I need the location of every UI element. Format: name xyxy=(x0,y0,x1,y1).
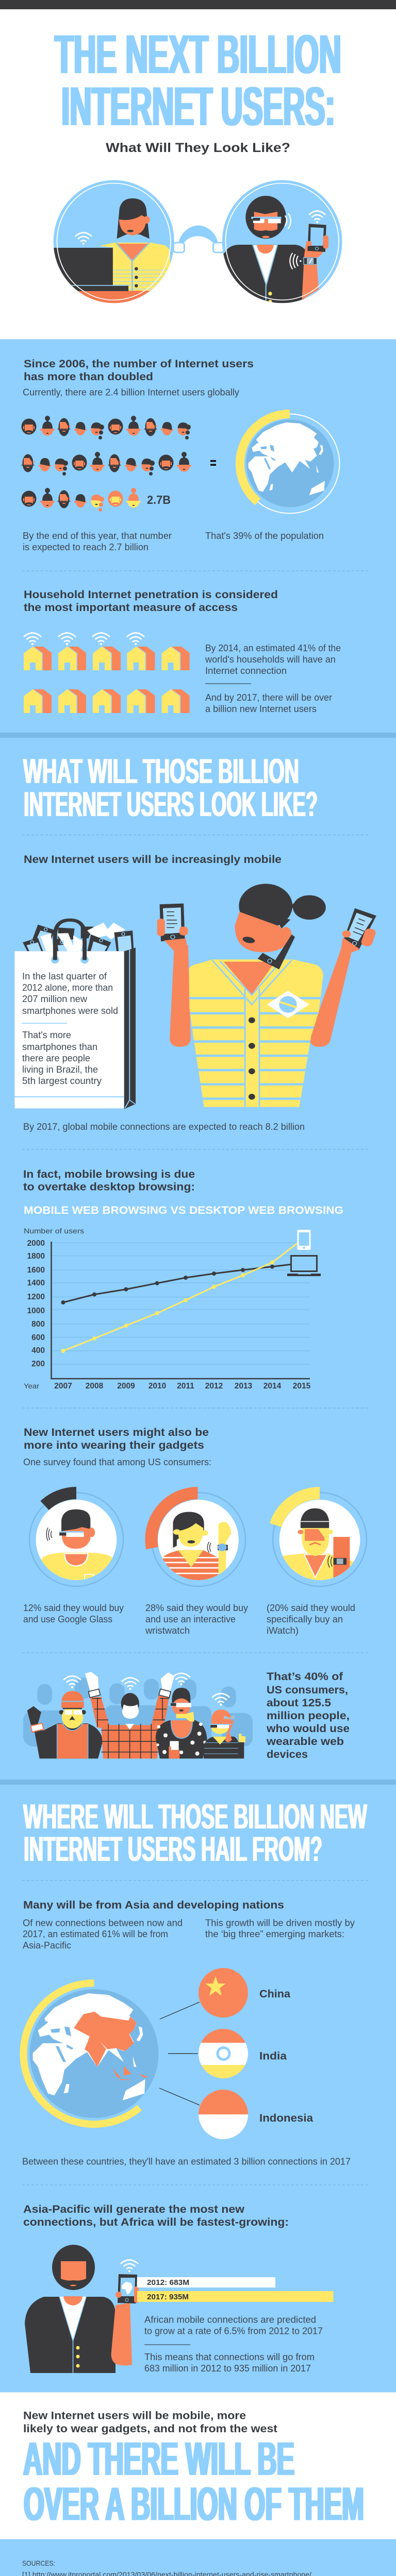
label: Indonesia: Indonesia xyxy=(259,2112,313,2124)
left lens: woman with laptop xyxy=(54,180,174,303)
text: reach 2.7 billion: By the end of this year, that number xyxy=(23,531,172,541)
text: survey results: (20% said they would xyxy=(267,1603,355,1613)
text: survey results: wristwatch xyxy=(145,1625,190,1636)
text: African connections: 683 million in 2012 to 935 million in 2017 xyxy=(144,2363,311,2374)
section heading: where from xyxy=(23,1797,367,1869)
text: African connections: to grow at a rate of 6.5% from 2012 to 2017 xyxy=(144,2326,323,2336)
text on bag: 5th largest country xyxy=(22,1076,102,1086)
closing headline xyxy=(23,2433,364,2531)
text: survey results: 12% said they would buy xyxy=(23,1603,124,1613)
text: big three xyxy=(205,1918,355,1939)
divider band xyxy=(0,1780,396,1785)
text: big three: the ‘big three” emerging markets: xyxy=(205,1929,344,1939)
text on bag: living in Brazil, the xyxy=(22,1064,98,1075)
pictogram: rows of faces xyxy=(22,416,191,512)
flag: China xyxy=(199,1968,248,2018)
line chart: 2000 xyxy=(27,1239,45,1248)
illustration: shopping bag of smartphones xyxy=(14,920,136,1109)
series: desktop xyxy=(61,1264,292,1304)
right lens rim xyxy=(225,183,339,300)
text: reach 2.7 billion: is expected to reach 2.7 billion xyxy=(23,542,148,552)
callout: 40 percent of US consumers: wearable web xyxy=(266,1736,344,1748)
right lens: man with phone and watch xyxy=(222,180,342,303)
text: survey results: specifically buy an xyxy=(267,1614,343,1624)
illustration: spectacles with two users xyxy=(52,178,352,307)
text on bag: 207 million new xyxy=(22,994,88,1004)
wifi icons xyxy=(63,1673,229,1706)
text on bag: In the last quarter of xyxy=(22,971,107,981)
text: household stats xyxy=(205,643,341,714)
text on bag: smartphones than xyxy=(22,1042,97,1052)
panel: sources: SOURCES: xyxy=(22,2559,55,2567)
Asian highlighted countries xyxy=(74,2012,148,2080)
illustration: African man with phone xyxy=(25,2245,139,2373)
text: big three: This growth will be driven mostly by xyxy=(205,1918,355,1928)
text on bag: That's more xyxy=(22,1030,71,1040)
background crowd xyxy=(23,1678,253,1747)
text: 61 percent from Asia-Pacific: 2017, an estimated 61% will be from xyxy=(23,1929,168,1939)
heading: mobile overtakes desktop: to overtake desktop browsing: xyxy=(23,1181,195,1193)
text: survey: One survey found that among US consumers: xyxy=(23,1457,211,1467)
connector lines xyxy=(159,2002,200,2105)
text: survey results xyxy=(23,1603,355,1636)
label: India: India xyxy=(259,2050,287,2062)
flag: Indonesia xyxy=(199,2090,248,2139)
bar: 2017: 2017: 935M xyxy=(147,2293,189,2301)
heading: mobile overtakes desktop xyxy=(23,1168,195,1193)
section heading: what will they look like xyxy=(23,752,318,824)
subtitle: What Will They Look Like? xyxy=(106,141,290,155)
text: current users: Currently, there are 2.4 billion Internet users globally xyxy=(23,387,239,398)
heading: Asia-Pacific and Africa: Asia-Pacific will generate the most new xyxy=(23,2204,245,2215)
line chart: 800 xyxy=(31,1320,45,1329)
closing statement xyxy=(23,2410,277,2435)
heading: Asia and developing nations: Many will be from Asia and developing nations xyxy=(23,1899,284,1911)
text on bag: smartphones were sold xyxy=(22,1006,118,1016)
line chart: 2009 xyxy=(117,1382,135,1391)
series: mobile xyxy=(61,1243,298,1353)
line chart: 1000 xyxy=(27,1307,45,1315)
donut: 28% wristwatch xyxy=(151,1493,245,1586)
donut: 20% iWatch xyxy=(273,1493,367,1586)
heading: users doubled xyxy=(24,358,254,383)
line chart: 1200 xyxy=(27,1293,45,1301)
text: survey results: iWatch) xyxy=(267,1625,299,1636)
line chart: Year xyxy=(24,1382,39,1390)
line chart: 2015 xyxy=(293,1382,311,1391)
text: 3 billion connections: Between these countries, they'll have an estimated 3 billion connections in 2017 xyxy=(22,2157,351,2167)
icon: phone xyxy=(297,1230,310,1250)
bar: 2012 xyxy=(137,2277,275,2287)
closing statement: New Internet users will be mobile, more xyxy=(23,2410,246,2421)
line chart: 2013 xyxy=(235,1382,253,1391)
callout: 40 percent of US consumers: about 125.5 xyxy=(267,1697,331,1709)
heading: users doubled: has more than doubled xyxy=(24,371,153,383)
heading: wearing gadgets: more into wearing their gadgets xyxy=(24,1439,204,1451)
text: survey results: and use an interactive xyxy=(145,1614,236,1624)
heading: increasingly mobile: New Internet users will be increasingly mobile xyxy=(24,854,282,866)
line chart: 2008 xyxy=(86,1382,104,1391)
text: household stats: And by 2017, there will be over xyxy=(205,692,332,703)
line chart: 2011 xyxy=(177,1382,194,1391)
donut: 12% Google Glass xyxy=(29,1493,123,1586)
text on bag: there are people xyxy=(22,1053,90,1063)
heading: users doubled: Since 2006, the number of Internet users xyxy=(24,358,254,370)
illustration: crowd wearing gadgets xyxy=(23,1672,253,1758)
globe with 39% arc xyxy=(240,414,339,513)
line chart: 2007 xyxy=(54,1382,72,1391)
line chart: 400 xyxy=(31,1346,45,1355)
line chart: 200 xyxy=(31,1360,45,1368)
text: survey results: and use Google Glass xyxy=(23,1614,112,1624)
title xyxy=(55,23,341,137)
pictogram: houses with wifi xyxy=(24,633,190,713)
bridge of spectacles xyxy=(173,226,224,252)
heading: household penetration xyxy=(24,589,278,614)
line chart: 2012 xyxy=(205,1382,223,1391)
left lens rim xyxy=(57,183,171,300)
heading: household penetration: Household Internet penetration is considered xyxy=(24,589,278,601)
bar: 2017 xyxy=(137,2291,333,2302)
text on bag xyxy=(22,971,118,1086)
heading: Asia-Pacific and Africa xyxy=(23,2204,289,2228)
heading: household penetration: the most important measure of access xyxy=(24,602,238,614)
text: household stats: Internet connection xyxy=(205,666,287,676)
line chart: 2010 xyxy=(148,1382,166,1391)
text: 61 percent from Asia-Pacific: Asia-Pacific xyxy=(23,1940,71,1951)
heading: wearing gadgets: New Internet users might also be xyxy=(24,1427,209,1438)
top dark bar xyxy=(0,0,396,9)
equals sign xyxy=(210,460,216,466)
heading: wearing gadgets xyxy=(24,1427,209,1451)
text: African connections: African mobile connections are predicted xyxy=(144,2314,316,2325)
person: yellow-faced man with beanie xyxy=(27,1691,103,1758)
blue section background xyxy=(0,339,396,2393)
text: mobile connections: By 2017, global mobile connections are expected to reach 8.2 billion xyxy=(23,1122,305,1132)
line chart: 2014 xyxy=(263,1382,282,1391)
callout: 40 percent of US consumers: who would use xyxy=(266,1723,350,1735)
line chart xyxy=(24,1227,321,1391)
icon: wifi over phone xyxy=(121,2260,138,2272)
illustration: woman with three phones in Brazil shirt xyxy=(157,884,377,1107)
text: household stats: a billion new Internet users xyxy=(205,704,317,714)
closing statement: likely to wear gadgets, and not from the west xyxy=(23,2423,277,2435)
icon: laptop xyxy=(287,1256,321,1276)
callout: 40 percent of US consumers: devices xyxy=(267,1749,308,1760)
line chart: 600 xyxy=(31,1333,45,1342)
text: 61 percent from Asia-Pacific xyxy=(23,1918,183,1951)
panel: sources xyxy=(0,2539,396,2576)
person: plaid shirt with raised arms xyxy=(85,1672,174,1758)
globe with Asia highlighted and 61% arc xyxy=(23,1983,158,2124)
person: girl with ponytail xyxy=(204,1709,245,1758)
text: household stats: By 2014, an estimated 41% of the xyxy=(205,643,341,653)
flag: India xyxy=(199,2029,248,2078)
text: African connections: This means that connections will go from xyxy=(144,2352,315,2362)
text: household stats: world's households will have an xyxy=(205,654,336,665)
callout: 40 percent of US consumers: million people, xyxy=(267,1710,350,1722)
divider band xyxy=(0,733,396,738)
text: survey results: 28% said they would buy xyxy=(145,1603,248,1613)
callout: 40 percent of US consumers: US consumers, xyxy=(267,1684,348,1696)
line chart: Number of users xyxy=(24,1227,84,1235)
text: reach 2.7 billion xyxy=(23,531,172,552)
label: China: China xyxy=(259,1988,290,2000)
line chart: 1600 xyxy=(27,1266,45,1275)
heading: mobile overtakes desktop: In fact, mobile browsing is due xyxy=(23,1168,195,1180)
line chart: 1400 xyxy=(27,1279,45,1287)
line chart: 1800 xyxy=(27,1252,45,1261)
chart title: MOBILE WEB BROWSING VS DESKTOP WEB BROWSING xyxy=(24,1205,343,1216)
heading: Asia-Pacific and Africa: connections, but Africa will be fastest-growing: xyxy=(23,2216,289,2228)
text: African connections xyxy=(144,2314,323,2374)
text: 61 percent from Asia-Pacific: Of new connections between now and xyxy=(23,1918,183,1928)
text on bag: 2012 alone, more than xyxy=(22,982,113,993)
bar: 2012: 2012: 683M xyxy=(147,2278,189,2287)
label: 2.7B: 2.7B xyxy=(147,493,171,506)
text: 39 percent: That's 39% of the population xyxy=(205,531,324,541)
person: polka-dot woman xyxy=(156,1688,207,1758)
callout: 40 percent of US consumers xyxy=(266,1671,350,1760)
callout: 40 percent of US consumers: That’s 40% of xyxy=(267,1671,343,1683)
